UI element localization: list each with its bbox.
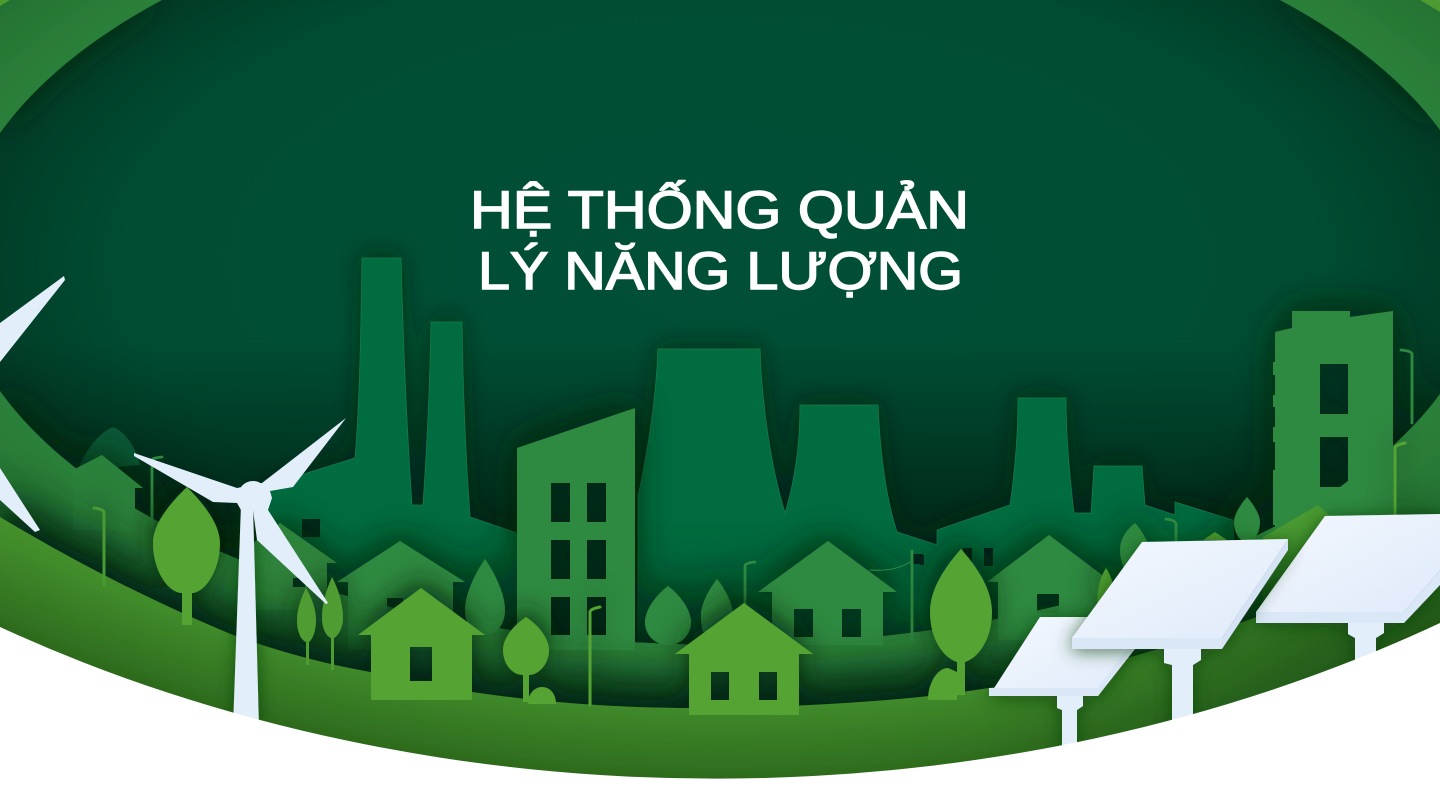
small round tree (503, 617, 549, 702)
apartment building (517, 408, 635, 650)
front house left (358, 588, 485, 700)
lime bump (1203, 532, 1227, 540)
turbine tower (233, 505, 259, 728)
corner accents (0, 0, 1440, 12)
wind turbine main (134, 418, 346, 728)
front hill right-side darkening (980, 545, 1440, 810)
lime leaf tree behind panels (1097, 568, 1113, 612)
front street lamps (94, 443, 1405, 705)
big tree right (930, 549, 992, 695)
factory skyline layer (262, 258, 1240, 700)
house behind small trees (337, 541, 465, 650)
tall tower with windows (1273, 311, 1393, 560)
back tree, far left (78, 427, 140, 470)
solar panel centre (1072, 539, 1288, 730)
soft wide shadow from the front hill (0, 485, 1440, 810)
front layer: bright green hill, houses and trees (0, 443, 1440, 810)
big tree left (153, 487, 220, 625)
solar panels (989, 514, 1440, 752)
mid street lamps and utility pole (152, 350, 1412, 640)
small windows in the houses (293, 578, 305, 587)
white foreground curve (0, 623, 1440, 810)
centre house (758, 541, 897, 645)
title (470, 180, 969, 301)
right house (987, 535, 1102, 640)
left house (73, 455, 143, 530)
solar panel left (989, 617, 1160, 752)
turbine hub (238, 481, 268, 511)
right hill peak (1263, 505, 1345, 620)
right bush (928, 668, 957, 700)
front house centre (675, 603, 813, 715)
house behind turbine (250, 523, 337, 610)
title: HỆ THỐNG QUẢN (470, 180, 969, 240)
factory windows (302, 519, 993, 566)
front hill (0, 517, 1440, 810)
solar panel right (1256, 514, 1440, 670)
title: LÝ NĂNG LƯỢNG (478, 242, 963, 301)
wind turbine left, partial (0, 276, 65, 532)
mid trees (465, 497, 1260, 645)
bush (528, 687, 556, 704)
turbine blades and hub (134, 418, 346, 604)
small tree pair (297, 588, 316, 665)
